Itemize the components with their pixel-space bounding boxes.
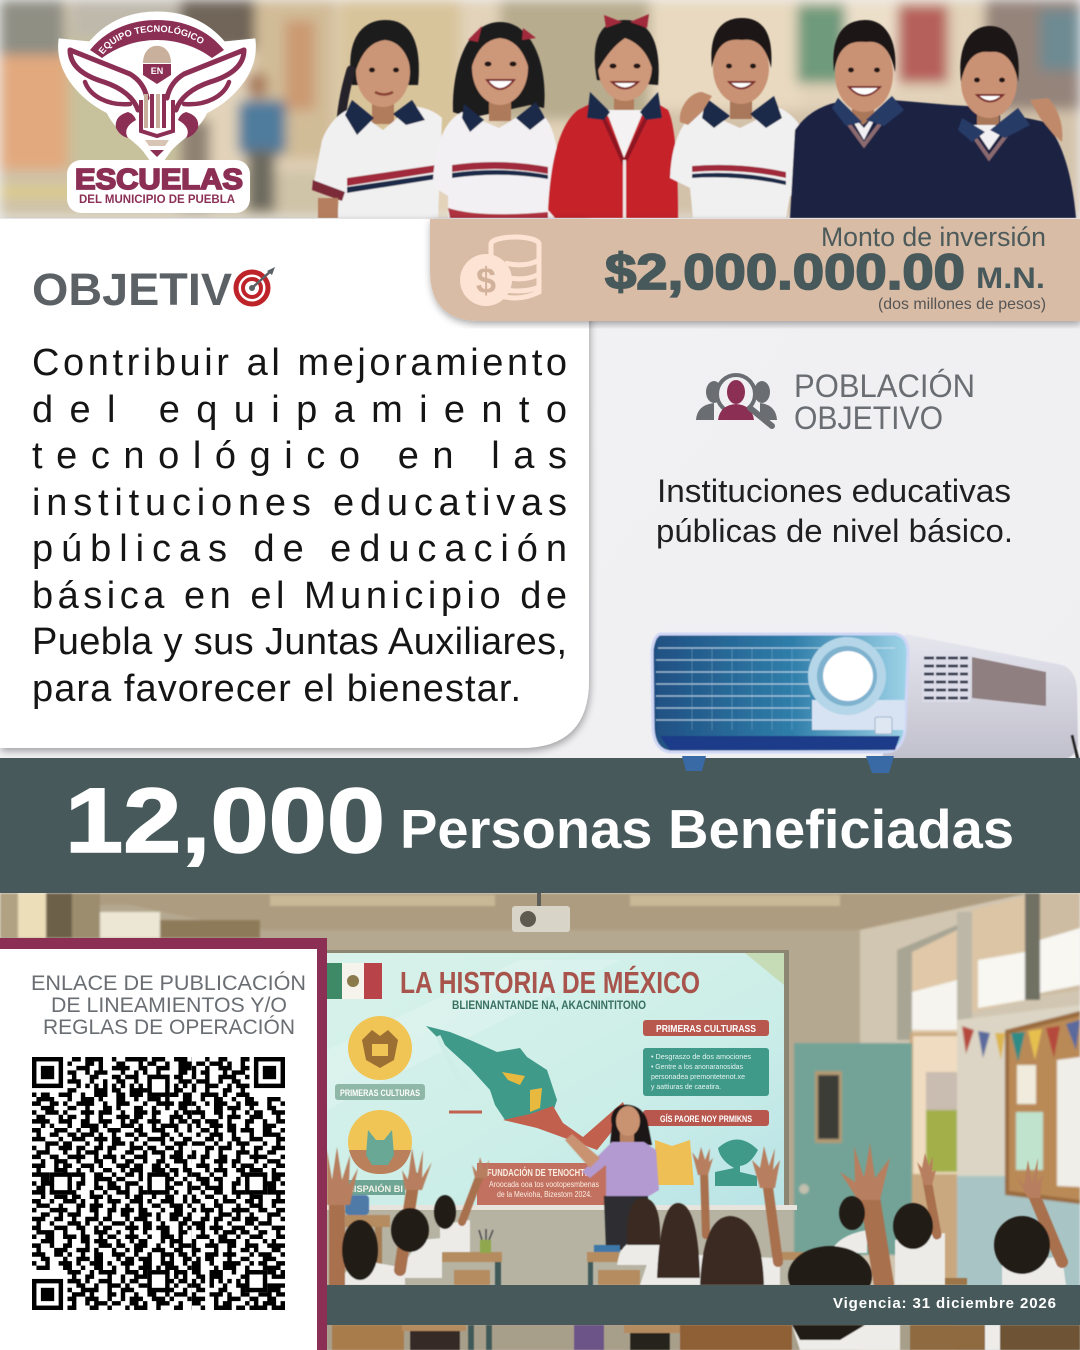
card: teal bullet list: • Desgraszo de dos amociones <box>651 1054 752 1061</box>
objective paragraph: tecnológico en las <box>32 435 567 477</box>
yellow book and tree icons <box>655 1139 758 1186</box>
right windows <box>897 925 957 1040</box>
objective paragraph: básica en el Municipio de <box>32 575 567 617</box>
card: teal bullet list: y aattiuras de caeatira. <box>651 1084 721 1091</box>
icon: people under magnifier <box>696 375 777 426</box>
projection screen <box>322 950 797 1210</box>
card: teal bullet list <box>643 1048 769 1096</box>
white objective card <box>0 219 589 748</box>
medallion: first cultures <box>348 1016 412 1080</box>
child 1 <box>312 20 442 218</box>
children group <box>312 14 1076 218</box>
amount: $2,000.000.00 <box>605 244 965 300</box>
child 2 <box>433 22 557 218</box>
blurred boy <box>246 72 268 98</box>
desks and floor <box>327 1195 1080 1350</box>
card: primeras culturas heading: PRIMERAS CULTURASS <box>656 1024 756 1035</box>
right wing <box>167 50 244 110</box>
QR finder pattern top-left <box>32 1057 68 1093</box>
objective paragraph: instituciones educativas <box>32 482 567 524</box>
panel: objective <box>0 219 589 748</box>
label: primeras culturas: PRIMERAS CULTURAS <box>340 1088 420 1098</box>
objective paragraph: para favorecer el bienestar. <box>32 668 521 710</box>
header photo: smiling schoolchildren <box>0 0 1080 218</box>
pencil and book emblem: EN <box>151 66 163 76</box>
objective heading: OBJETIV <box>32 264 232 315</box>
projector feet over band <box>682 756 894 773</box>
validity footer strip: Vigencia: 31 diciembre 2026 <box>833 1295 1056 1312</box>
below the strip <box>327 1325 1080 1350</box>
currency: M.N. <box>976 262 1045 295</box>
room walls and ceiling <box>0 893 1080 1350</box>
screen subtitle: BLIENNANTANDE NA, AKACNINTITONO <box>452 998 646 1012</box>
left wing <box>70 50 147 110</box>
card: teal bullet list: personadea premontetenot.xe <box>651 1074 745 1081</box>
label: second culture: D MISPAIÓN BI <box>337 1183 403 1194</box>
QR finder pattern top-right <box>249 1057 285 1093</box>
child 5 <box>790 20 1000 218</box>
hand over far shoulder <box>1030 98 1062 142</box>
blurred street background <box>0 0 1080 218</box>
icon: target with arrow <box>236 267 275 304</box>
amount in words: (dos millones de pesos) <box>878 296 1046 313</box>
label: primeras culturas <box>335 1084 425 1100</box>
population description: Instituciones educativas <box>657 473 1011 509</box>
icon: coins with dollar <box>460 237 539 306</box>
child 6 <box>935 26 1076 218</box>
panel: QR link <box>0 938 327 1350</box>
card: second heading <box>643 1110 769 1126</box>
objective paragraph: del equipamiento <box>32 389 567 431</box>
bunting <box>962 1026 974 1054</box>
QR alignment patterns <box>52 1077 265 1290</box>
link caption <box>31 972 306 1039</box>
population heading: POBLACIÓN <box>794 368 975 404</box>
logo: Equipo Tecnológico en Escuelas del Municipio de Puebla: EQUIPO TECNOLÓGICO <box>98 25 204 54</box>
mexican flag <box>327 963 382 999</box>
objective paragraph: Contribuir al mejoramiento <box>32 342 567 384</box>
wall under screen <box>327 1210 797 1290</box>
icon: coins with dollar: $ <box>476 260 496 301</box>
tan banner <box>430 219 1080 321</box>
open window <box>910 1033 957 1283</box>
lower wall <box>956 1005 1080 1176</box>
card: fundación de tenochtitlán: de la Mevioha, Bizestom 2024. <box>497 1190 592 1199</box>
population heading <box>794 368 975 436</box>
validity footer strip <box>327 1285 1080 1325</box>
QR finder pattern bottom-left <box>32 1274 68 1310</box>
card: teal bullet list: • Gentre a los anonaranosidas <box>651 1064 743 1071</box>
objective paragraph: Puebla y sus Juntas Auxiliares, <box>32 621 567 663</box>
logo white sticker base <box>60 13 254 168</box>
top arc band <box>90 20 224 58</box>
map of mexico <box>426 1026 627 1150</box>
arms <box>337 1170 1062 1285</box>
hands <box>327 1143 1043 1205</box>
students with raised hands <box>327 1143 1066 1306</box>
population heading: OBJETIVO <box>794 400 943 436</box>
pencil and book emblem <box>116 46 198 157</box>
card: fundación de tenochtitlán <box>477 1163 609 1205</box>
door <box>794 1043 912 1255</box>
maroon frame and white card <box>0 938 327 1350</box>
number 12,000: 12,000 <box>65 770 385 872</box>
municipality line: DEL MUNICIPIO DE PUEBLA <box>79 192 235 206</box>
card: second heading: GÍS PAORE NOY PRMIKNS <box>660 1114 752 1125</box>
label: monto de inversión: Monto de inversión <box>821 222 1046 252</box>
card: primeras culturas heading <box>643 1020 769 1036</box>
heads and hair <box>342 1195 1050 1306</box>
arc lettering <box>100 32 216 62</box>
link caption: DE LINEAMIENTOS Y/O <box>51 994 287 1017</box>
link caption: REGLAS DE OPERACIÓN <box>43 1016 295 1039</box>
corkboard <box>1005 1011 1080 1204</box>
child 3 <box>548 14 678 218</box>
card: fundación de tenochtitlán: Aroocada ooa tos vootopesmbenas <box>489 1180 599 1189</box>
banner: people benefited <box>0 756 1080 893</box>
screen title: LA HISTORIA DE MÉXICO <box>400 965 700 1000</box>
objective paragraph: públicas de educación <box>32 528 567 570</box>
illustration: video projector <box>652 634 1078 762</box>
ESCUELAS wordmark: ESCUELAS <box>75 164 243 196</box>
population description: públicas de nivel básico. <box>656 513 1013 549</box>
label: second culture <box>348 1180 405 1195</box>
QR right-hand modules <box>76 1059 285 1308</box>
ceiling projector <box>512 893 570 932</box>
link caption: ENLACE DE PUBLICACIÓN <box>31 972 306 995</box>
panel: investment amount <box>430 219 1080 321</box>
card: fundación de tenochtitlán: FUNDACIÓN DE TENOCHTI <box>487 1166 587 1179</box>
QR code <box>32 1057 285 1310</box>
hand on shoulder <box>680 92 712 125</box>
classroom photo <box>0 893 1080 1350</box>
logo: Equipo Tecnológico en Escuelas del Municipio de Puebla <box>58 12 256 213</box>
teacher <box>565 1105 659 1250</box>
shirts <box>340 1220 1066 1285</box>
label personas beneficiadas: Personas Beneficiadas <box>400 798 1014 860</box>
child 4 <box>670 18 811 218</box>
side wall <box>860 893 1080 1350</box>
medallion: second <box>348 1110 412 1174</box>
population description <box>656 473 1013 549</box>
panel: target population <box>656 368 1013 549</box>
objective paragraph <box>32 342 567 710</box>
